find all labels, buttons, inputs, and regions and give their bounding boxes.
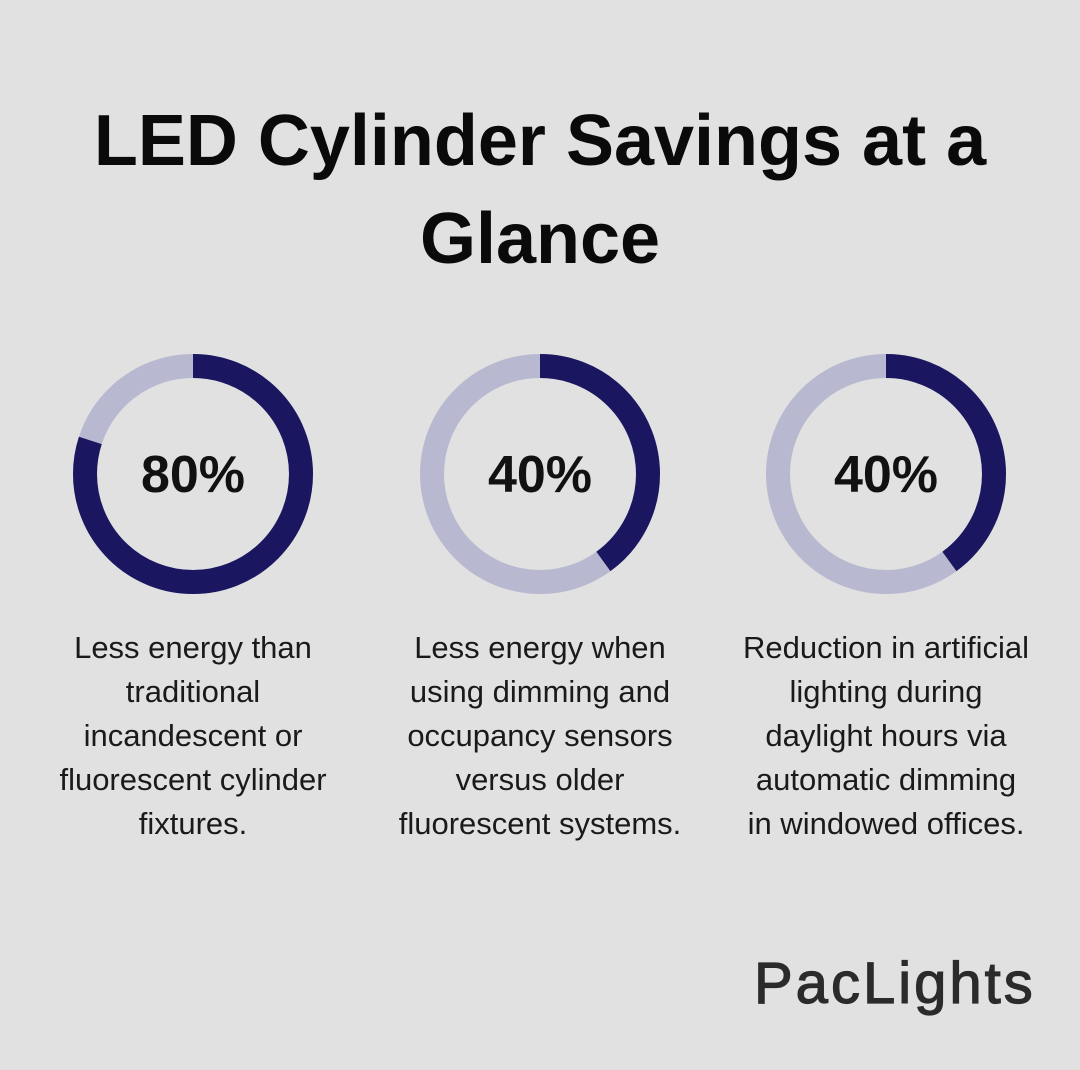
panel: 80%	[59, 354, 327, 841]
description: incandescent or	[84, 718, 302, 753]
description: in windowed offices.	[748, 806, 1024, 841]
description: versus older	[456, 762, 624, 797]
description: daylight hours via	[765, 718, 1007, 753]
description: fluorescent cylinder	[59, 762, 327, 797]
description: Reduction in artificial	[743, 630, 1029, 665]
title: Glance	[420, 199, 660, 279]
donut chart 40%	[766, 354, 1006, 594]
description: fixtures.	[139, 806, 247, 841]
description: using dimming and	[410, 674, 670, 709]
donut chart 80%	[73, 354, 313, 594]
title: LED Cylinder Savings at a	[94, 101, 986, 181]
description	[59, 630, 327, 841]
title	[94, 101, 987, 279]
panel: 40% daylight	[743, 354, 1029, 841]
donut chart 80%: 80%	[141, 446, 245, 504]
description: occupancy sensors	[407, 718, 673, 753]
description: Less energy than	[74, 630, 312, 665]
donut chart 40%	[420, 354, 660, 594]
donut chart 40%: 40%	[834, 446, 938, 504]
description	[399, 630, 681, 841]
panel: 40% dimming	[399, 354, 681, 841]
description: Less energy when	[414, 630, 666, 665]
logo: PacLights	[754, 951, 1036, 1016]
description: lighting during	[789, 674, 983, 709]
description: fluorescent systems.	[399, 806, 681, 841]
description: automatic dimming	[756, 762, 1016, 797]
description	[743, 630, 1029, 841]
donut chart 40%: 40%	[488, 446, 592, 504]
description: traditional	[126, 674, 260, 709]
